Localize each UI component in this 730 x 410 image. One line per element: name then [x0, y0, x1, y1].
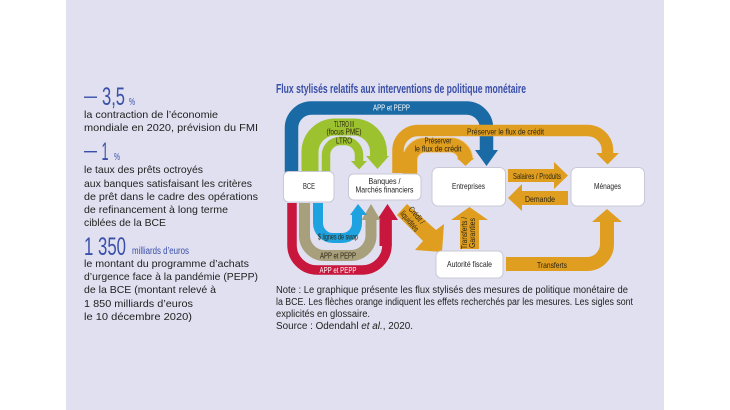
box: Entreprises	[432, 168, 506, 206]
arrow: lignes de swap (light blue)	[318, 203, 367, 242]
figure: -1 %: 1	[102, 138, 108, 166]
arrow: Transferts / Garanties	[451, 207, 488, 249]
figure: -1 %: de refinancement à long terme	[84, 204, 228, 216]
figure: -1 %: le taux des prêts octroyés	[84, 164, 203, 176]
figure: -3.5 %	[84, 83, 258, 134]
arrow: Préserver le flux de crédit to Entreprises (orange)	[392, 136, 474, 174]
arrow: Demande: Demande	[525, 194, 555, 204]
arrow: Préserver le flux de crédit to Entreprises (orange): le flux de crédit	[414, 144, 462, 154]
figure: 1 350 milliards d'euros: le 10 décembre 2020)	[84, 311, 192, 323]
arrow: Crédit / liquidités: Crédit /	[407, 204, 427, 226]
arrow: Transferts / Garanties: Transferts /	[459, 216, 469, 249]
note and source: explicités en glossaire.	[276, 309, 370, 320]
figure: 1 350 milliards d'euros: milliards d’euros	[132, 246, 189, 257]
arrow: Transferts / Garanties: Garanties	[467, 218, 477, 248]
chart title: Flux stylisés relatifs aux interventions de politique monétaire	[276, 81, 526, 96]
arrow: Salaires / Produits	[508, 162, 568, 189]
figure: 1 350 milliards d'euros: 1 850 milliards d’euros	[84, 298, 193, 310]
box: BCE: BCE	[303, 181, 315, 191]
figure: -3.5 %: mondiale en 2020, prévision du FMI	[84, 122, 258, 134]
figure: 1 350 milliards d'euros: d’urgence face à la pandémie (PEPP)	[84, 271, 258, 283]
note and source: Note : Le graphique présente les flux stylisés des mesures de politique monétaire de	[276, 285, 628, 296]
figure: -3.5 %: %	[129, 97, 135, 108]
figure: 1 350 milliards d'euros: le montant du programme d’achats	[84, 258, 249, 270]
box: Banques / Marchés financiers	[348, 174, 421, 200]
figure: 1 350 milliards d'euros: 1 350	[84, 233, 126, 261]
arrow: Salaires / Produits: Salaires / Produits	[513, 171, 561, 181]
arrow: APP et PEPP (red)	[292, 203, 398, 275]
arrow: APP et PEPP (tan)	[304, 203, 380, 260]
arrow: Transferts to Ménages: Transferts	[537, 260, 567, 270]
arrow: Préserver le flux de crédit to Ménages (orange): Préserver le flux de crédit	[467, 126, 545, 136]
figure: 1 350 milliards d'euros: de la BCE (montant relevé à	[84, 284, 216, 296]
box: Ménages	[571, 168, 644, 206]
figure: -1 %	[84, 138, 258, 229]
note and source: la BCE. Les flèches orange indiquent les effets recherchés par les mesures. Les sigles sont	[276, 297, 633, 308]
figure: -3.5 %: 3,5	[102, 83, 125, 111]
arrow: APP et PEPP (red): APP et PEPP	[320, 265, 357, 275]
arrow: Préserver le flux de crédit to Entreprises (orange): Préserver	[424, 136, 452, 146]
arrow: APP et PEPP (tan): APP et PEPP	[320, 250, 356, 260]
box: Banques / Marchés financiers: Banques /	[368, 176, 401, 186]
arrow: Crédit / liquidités: liquidités	[398, 209, 421, 233]
arrow: lignes de swap (light blue): $ lignes de swap	[318, 232, 358, 242]
box: Banques / Marchés financiers: Marchés financiers	[356, 184, 414, 194]
flow diagram	[284, 102, 644, 278]
arrow: Demande	[508, 184, 568, 211]
box: BCE	[284, 172, 334, 202]
arrow: APP et PEPP (blue): APP et PEPP	[373, 102, 410, 112]
arrow: Transferts to Ménages	[506, 209, 622, 270]
key figures column	[84, 83, 258, 323]
arrow: TLTRO III (green): (focus PME)	[326, 126, 362, 136]
arrow: LTRO (green): LTRO	[336, 136, 352, 146]
box: Autorité fiscale	[436, 251, 503, 278]
figure: -1 %: ciblées de la BCE	[84, 217, 166, 229]
figure: -1 %: aux banques satisfaisant les critères	[84, 178, 252, 190]
figure: -1 %: de prêt dans le cadre des opérations	[84, 191, 258, 203]
arrow: Préserver le flux de crédit to Ménages (orange)	[398, 126, 619, 173]
note and source	[276, 285, 633, 332]
arrow: Crédit / liquidités	[397, 204, 444, 252]
note and source: Source : Odendahl et al., 2020.	[276, 321, 413, 332]
figure: -1 %: %	[114, 152, 120, 163]
arrow: APP et PEPP (blue)	[292, 102, 498, 173]
arrow: TLTRO III (green)	[310, 119, 389, 172]
figure: 1 350 milliards d'euros	[84, 233, 258, 323]
figure: -3.5 %: la contraction de l’économie	[84, 109, 218, 121]
box: Autorité fiscale: Autorité fiscale	[447, 259, 492, 269]
arrow: LTRO (green)	[326, 136, 367, 172]
box: Entreprises: Entreprises	[452, 181, 485, 191]
arrow: TLTRO III (green): TLTRO III	[334, 119, 354, 129]
box: Ménages: Ménages	[594, 181, 621, 191]
